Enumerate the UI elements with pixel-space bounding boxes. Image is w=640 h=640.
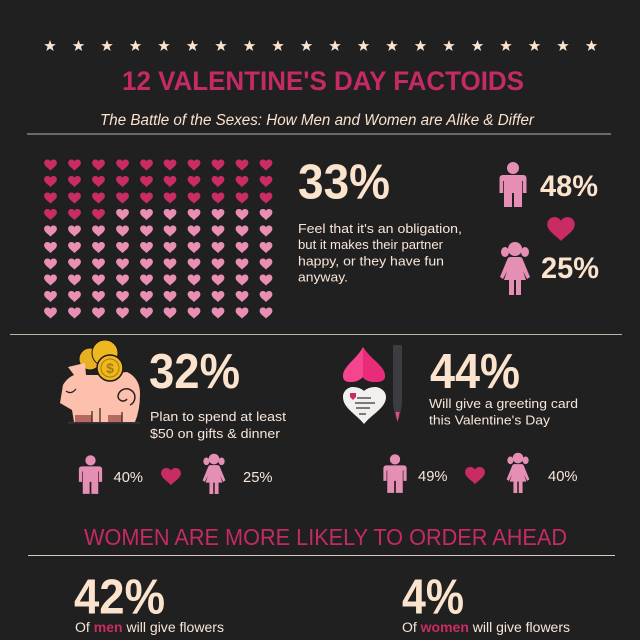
33% description	[298, 221, 462, 284]
33% description: Feel that it's an obligation,	[298, 221, 462, 236]
icons and figures: men 49%, women 40%: 49%	[418, 468, 448, 485]
44% stat: 44%	[430, 345, 520, 399]
44% description: this Valentine's Day	[429, 412, 551, 428]
icon: man 48%	[500, 162, 526, 207]
icon: piggy bank with coins: $	[106, 360, 114, 376]
48%: 48%	[540, 170, 598, 203]
subtitle: The Battle of the Sexes: How Men and Women are Alike & Differ	[100, 112, 535, 129]
icons and figures: men 49%, women 40%: 40%	[548, 468, 578, 485]
women flowers caption: Of women will give flowers	[402, 620, 570, 635]
men flowers caption: Of men will give flowers	[75, 620, 224, 635]
33% description: anyway.	[298, 270, 348, 284]
33% description: happy, or they have fun	[298, 254, 444, 268]
section heading: WOMEN ARE MORE LIKELY TO ORDER AHEAD	[84, 524, 567, 550]
icons and figures: men 40%, women 25%: 40%	[114, 469, 143, 486]
icons and figures: men 49%, women 40%	[383, 453, 578, 493]
25%: 25%	[541, 252, 599, 285]
icon: heart card and pen	[343, 345, 402, 424]
32% stat: 32%	[149, 345, 240, 399]
star row	[44, 40, 597, 51]
32% description: $50 on gifts & dinner	[150, 426, 281, 441]
32% description: Plan to spend at least	[150, 409, 286, 424]
icon: heart	[547, 217, 575, 241]
icons and figures: men 40%, women 25%: 25%	[243, 469, 272, 486]
42% stat: 42%	[74, 570, 165, 624]
33% stat: 33%	[298, 156, 390, 210]
44% description: Will give a greeting card	[429, 396, 578, 411]
icon: woman 25%	[500, 242, 530, 295]
44% description	[429, 396, 578, 428]
icons and figures: men 40%, women 25%	[79, 454, 272, 494]
title: 12 VALENTINE'S DAY FACTOIDS	[122, 66, 524, 96]
heart grid: 33 of 100	[44, 160, 272, 319]
4% stat: 4%	[402, 570, 464, 624]
32% description	[150, 409, 286, 441]
33% description: but it makes their partner	[298, 237, 444, 252]
icon: piggy bank with coins	[60, 340, 140, 424]
